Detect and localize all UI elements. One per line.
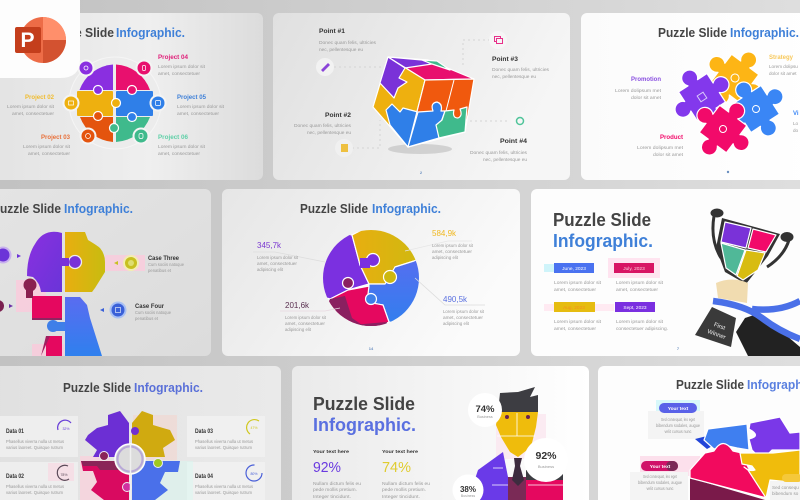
stat 201,6k: amet, consectetuer [285,321,325,326]
stat 201,6k: 201,6k [285,301,310,310]
stat 92%: Nullam dictum felis eu [313,481,361,486]
date: Sept [615,302,668,331]
page number [727,171,729,173]
data 04: varius laoreet. Quisque rutrum [195,490,252,495]
ribbon [713,301,800,339]
point 2 [294,113,353,157]
date: July: Lorem ipsum dolor sit [616,280,664,285]
head puzzle [24,232,105,356]
stat 74%: Your text here [382,449,418,455]
labels: Lo [793,121,799,126]
title: Puzzle Slide [313,393,415,414]
puzzle cube [373,57,474,147]
powerpoint badge [0,0,80,78]
title [553,209,653,251]
stat 490,5k: Lorem ipsum dolor sit [443,309,485,314]
labels: Vi [793,111,799,117]
puzzle: pink piece [696,102,750,156]
stat 584,9k: Lorem ipsum dolor sit [432,243,474,248]
gear puzzle [80,411,193,500]
labels: projects [7,55,225,156]
point 2: Point #2 [325,113,352,119]
labels: projects: Lorem ipsum dolor sit [158,144,206,149]
title: Puzzle Slide [553,209,651,230]
title: Infographic. [313,414,416,435]
case four: Case Four [135,304,165,310]
date: Aug: Aug, 2023 [563,305,585,311]
callout: yellow: bibendum so [772,491,799,496]
stat 584,9k [405,229,474,260]
stat 490,5k: amet, consectetuer [443,315,483,320]
date: Sept: consectetuer adipiscing. [616,326,668,331]
data 02: varius laoreet. Quisque rutrum [6,490,63,495]
winner badge: First [713,322,726,332]
callout: pink: velit cursus nunc [646,486,674,491]
stat 201,6k: adipiscing elit [285,327,312,332]
panel: circular puzzle slide [222,189,520,356]
data 01: varius laoreet. Quisque rutrum [6,445,63,450]
panel: isometric puzzle slide [598,366,800,500]
point 3 [489,31,550,79]
round puzzle [323,230,419,326]
title: Puzzle Slide [676,377,744,392]
labels: dolor sit amet [769,71,797,76]
title: Puzzle Slide [658,25,727,40]
case left icons [0,246,21,312]
stat 345,7k: adipiscing elit [257,267,284,272]
title: Puzzle Slide [300,201,368,216]
isometric puzzle [690,417,800,500]
labels: projects: amet, consectetuer [177,111,219,116]
title: Infographic. [116,25,185,40]
bubble 74%: Business [477,415,493,419]
stat 345,7k [253,241,325,272]
point 1: Point #1 [319,29,346,35]
bubble 74%: 74% [475,404,495,415]
data 03: Phasellus viverra nulla ut metus [195,439,254,444]
callout: pink: Sed consequat, leo eget [643,474,677,479]
case three [114,255,184,273]
labels: Lorem dolipsum met [615,88,662,93]
title: Puzzle Slide [63,380,131,395]
bubble 38% [452,474,484,500]
callout: blue [648,400,704,439]
labels [615,55,799,157]
labels: do [793,128,799,133]
title [63,380,203,395]
panel: project brain puzzle slide [0,13,263,180]
data 03: varius laoreet. Quisque rutrum [195,445,252,450]
date: Sept: Sept, 2023 [623,305,647,311]
title [0,201,133,216]
labels: dolor sit amet [631,95,662,100]
data 04: Data 04 [195,474,214,480]
case three: Case Three [148,256,180,262]
colour fringes [16,255,145,356]
labels: projects: Lorem ipsum dolor sit [23,144,71,149]
businessman puzzle [468,387,563,500]
title [300,201,441,216]
data 04 [187,462,265,500]
stat 584,9k: adipiscing elit [432,255,459,260]
point 4: Donec quam felis, ultricies [470,150,528,155]
point 1: Donec quam felis, ultricies [319,40,377,45]
labels: projects: amet, consectetuer [12,111,54,116]
point 3: nec, pellentesque eu [492,74,536,79]
callout: yellow [770,474,800,500]
stat 490,5k: adipiscing elit [443,321,470,326]
data 01: Phasellus viverra nulla ut metus [6,439,65,444]
point 2: nec, pellentesque eu [307,130,351,135]
labels: projects: Project 02 [25,95,55,101]
data 02 [0,462,78,500]
stat 74% [382,449,430,499]
date: June: Lorem ipsum dolor sit [554,280,602,285]
panel: cube puzzle slide [273,13,570,180]
point 4: nec, pellentesque eu [483,157,527,162]
callout: pink: Your text [650,464,671,470]
bubble 92% [524,438,568,482]
stat 345,7k: 345,7k [257,241,282,250]
case four [100,302,171,321]
panel: head puzzle slide [0,189,211,356]
labels: projects: amet, consectetuer [158,151,200,156]
puzzle circle [77,64,153,142]
data 04: 80% [250,472,258,476]
puzzle: yellow piece [708,51,762,105]
case three: Cum sociis natoque [148,262,184,267]
labels: Promotion [631,77,661,83]
title: Infographic. [372,201,441,216]
point 4: Point #4 [500,139,528,145]
puzzle: purple piece [674,69,730,125]
callout: pink [630,456,700,500]
stat 74%: pede mollis pretium. [382,487,426,492]
bubble 92%: Business [538,464,554,469]
callout: pink: bibendum sodales, augue [638,480,682,485]
puzzle: blue piece [728,81,784,137]
connector lines [334,40,510,148]
title [44,25,185,40]
point 4 [470,112,529,162]
labels: Lorem dolipsum met [637,145,684,150]
data 01: 32% [62,427,70,431]
bubble 92%: 92% [535,450,557,462]
stat 92%: Integer tincidunt. [313,494,351,499]
title: Infographic. [553,230,653,251]
callout: blue: bibendum sodales, augue [656,423,700,428]
bubble 38%: Business [461,494,475,498]
point 3: Point #3 [492,57,519,63]
date: Aug: Lorem ipsum dolor sit [554,319,602,324]
title [313,393,416,435]
point 2: Donec quam felis, ultricies [294,123,352,128]
magnifier base [69,57,161,180]
date: Aug [544,302,614,331]
title: Infographic. [134,380,203,395]
winner badge: Winner [706,329,726,341]
case four: penatibus et [135,316,159,321]
callout: blue: Sed consequat, leo eget [661,417,695,422]
sleeve [736,313,800,356]
stat 345,7k: amet, consectetuer [257,261,297,266]
stat 490,5k: 490,5k [443,295,468,304]
panel: gear puzzle slide [0,366,281,500]
bubble 74% [468,393,502,427]
stat 92%: 92% [313,460,341,476]
stat 74%: Integer tincidunt. [382,494,420,499]
stat 92%: Your text here [313,449,349,455]
data 02: Data 02 [6,474,25,480]
data 02: 78% [60,473,68,477]
title [658,25,799,40]
callout: yellow: Sed consequ [772,485,799,490]
stat 92%: pede mollis pretium. [313,487,357,492]
case three: penatibus et [148,268,172,273]
labels: projects: Project 04 [158,55,189,61]
panel: four puzzle pieces slide [581,13,800,180]
data 03: Data 03 [195,429,214,435]
point 1: nec, pellentesque eu [319,47,363,52]
data 01 [0,416,78,457]
title: Infographic. [64,201,133,216]
data 04: Phasellus viverra nulla ut metus [195,484,254,489]
labels: projects: Project 05 [177,95,207,101]
labels: Lorem dolipsu [769,64,798,69]
data 03: 47% [250,426,258,430]
stat 584,9k: amet, consectetuer [432,249,472,254]
stat 201,6k: Lorem ipsum dolor sit [285,315,327,320]
page number: 14 [369,346,374,351]
date: June [544,263,602,292]
stat 584,9k: 584,9k [432,229,457,238]
icon: PowerPoint logo: P [20,29,35,52]
data 02: Phasellus viverra nulla ut metus [6,484,65,489]
hand [716,280,748,303]
labels: projects: amet, consectetuer [158,71,200,76]
labels: dolor sit amet [653,152,684,157]
point 1 [316,29,377,76]
labels: projects: Project 03 [41,135,71,141]
title: Puzzle Slide [44,25,114,40]
point 3: Donec quam felis, ultricies [492,67,550,72]
trophy [710,208,794,284]
labels: Product [660,135,683,141]
page number: 2 [420,170,423,175]
stat 490,5k [415,278,485,326]
stat 345,7k: Lorem ipsum dolor sit [257,255,299,260]
data 03 [187,416,265,457]
data 01: Data 01 [6,429,25,435]
date: July: July, 2023 [623,266,645,272]
labels: projects: Lorem ipsum dolor sit [7,104,55,109]
title [676,377,800,392]
stat 74%: Nullam dictum felis eu [382,481,430,486]
stat 92% [313,449,361,499]
labels: Strategy [769,55,794,61]
date: July [608,258,664,292]
page number: 7 [677,346,680,351]
stat 201,6k [280,301,340,332]
case four: Cum sociis natoque [135,310,171,315]
cube shadow [388,144,452,154]
date: Aug: amet, consectetuer [554,326,596,331]
date: Sept: Lorem ipsum dolor sit [616,319,664,324]
date: June: amet, consectetuer [554,287,596,292]
date: July: amet, consectetuer [616,287,658,292]
panel: businessman puzzle slide [292,366,589,500]
labels: projects: Lorem ipsum dolor sit [177,104,225,109]
icon badges [62,60,166,144]
labels: projects: Project 06 [158,135,189,141]
panel: trophy slide [531,189,800,356]
date: June: June, 2023 [562,266,586,272]
callout: blue: velit cursus nunc [664,429,692,434]
bubble 38%: 38% [460,485,476,494]
stat 74%: 74% [382,460,411,476]
labels: projects: amet, consectetuer [28,151,70,156]
winner badge [695,307,736,347]
callout: blue: Your text [668,406,689,412]
labels: projects: Lorem ipsum dolor sit [158,64,206,69]
